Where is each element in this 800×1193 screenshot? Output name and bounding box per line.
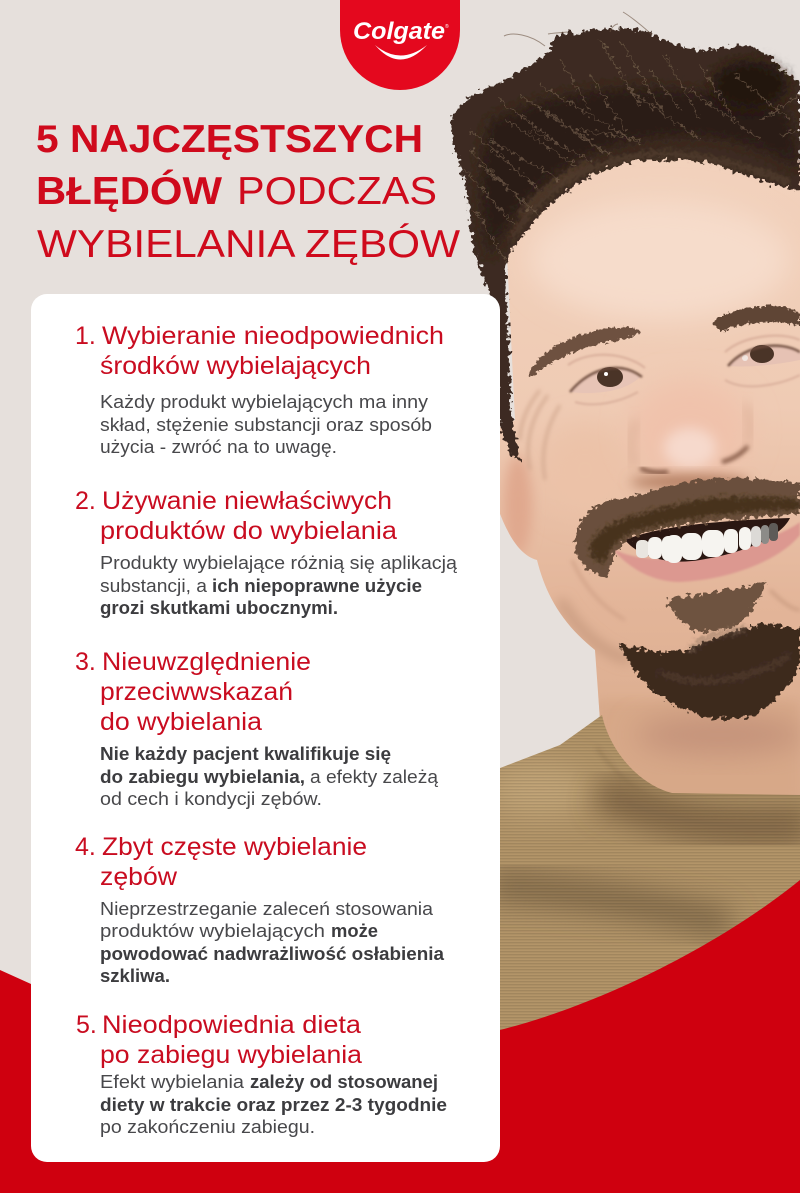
item 1: środków wybielających xyxy=(100,352,371,380)
item 2: Używanie niewłaściwych xyxy=(102,487,392,515)
neck and face skin xyxy=(495,145,800,800)
item 2: produktów do wybielania xyxy=(100,517,397,545)
soul patch xyxy=(667,582,767,632)
item 3: przeciwwskazań xyxy=(100,678,293,706)
item 3: Nieuwzględnienie xyxy=(102,648,311,676)
item 3: 3. xyxy=(75,648,96,676)
sweater xyxy=(490,715,800,1040)
item 4: szkliwa. xyxy=(100,966,170,986)
item 2: grozi skutkami ubocznymi. xyxy=(100,598,338,618)
mouth: lips and teeth xyxy=(612,518,800,582)
title: 5 NAJCZĘSTSZYCH xyxy=(36,118,423,161)
item 2 xyxy=(75,487,458,618)
item 1: skład, stężenie substancji oraz sposób xyxy=(100,415,432,435)
item 3: do zabiegu wybielania, xyxy=(100,767,305,787)
item 5: 5. xyxy=(76,1011,97,1039)
stray hairs xyxy=(504,12,652,46)
item 5: po zakończeniu zabiegu. xyxy=(100,1117,315,1137)
red wave xyxy=(0,880,800,1193)
item 4: zębów xyxy=(100,863,178,891)
item 3: do wybielania xyxy=(100,708,262,736)
mustache xyxy=(575,479,800,578)
photo: smiling man xyxy=(451,12,800,1040)
item 1: 1. xyxy=(75,322,96,350)
item 5: Nieodpowiednia dieta xyxy=(102,1011,361,1039)
item 4: Nieprzestrzeganie zaleceń stosowania xyxy=(100,899,434,919)
panel: list of mistakes xyxy=(31,294,500,1162)
item 5 xyxy=(76,1011,447,1137)
logo: Colgate badge: ® xyxy=(445,23,449,30)
item 4 xyxy=(75,833,445,986)
item 2: ich niepoprawne użycie xyxy=(212,576,422,596)
title: BŁĘDÓW xyxy=(36,169,222,213)
item 2: Produkty wybielające różnią się aplikacją xyxy=(100,553,458,573)
item 4: Zbyt częste wybielanie xyxy=(102,833,367,861)
eyes xyxy=(568,336,800,404)
eyebrows xyxy=(528,306,800,378)
title: PODCZAS xyxy=(237,170,437,213)
title xyxy=(36,118,460,266)
goatee xyxy=(620,623,800,719)
item 4: powodować nadwrażliwość osłabienia xyxy=(100,944,445,964)
item 5: Efekt wybielania xyxy=(100,1072,245,1092)
title: WYBIELANIA ZĘBÓW xyxy=(37,223,460,266)
item 1 xyxy=(75,322,444,457)
item 4: produktów wybielających xyxy=(100,921,325,941)
item 5: po zabiegu wybielania xyxy=(100,1041,362,1069)
item 2: 2. xyxy=(75,487,96,515)
item 2: substancji, a xyxy=(100,576,208,596)
item 5: zależy od stosowanej xyxy=(250,1072,438,1092)
item 1: Każdy produkt wybielających ma inny xyxy=(100,392,428,412)
item 3 xyxy=(75,648,439,809)
item 5: diety w trakcie oraz przez 2-3 tygodnie xyxy=(100,1095,447,1115)
item 4: może xyxy=(331,921,378,941)
teeth xyxy=(636,523,778,563)
item 3: od cech i kondycji zębów. xyxy=(100,789,322,809)
logo: Colgate badge xyxy=(340,0,460,90)
item 1: użycia - zwróć na to uwagę. xyxy=(100,437,337,457)
item 3: Nie każdy pacjent kwalifikuje się xyxy=(100,744,391,764)
item 4: 4. xyxy=(75,833,96,861)
hair xyxy=(451,28,800,462)
item 3: a efekty zależą xyxy=(310,767,439,787)
logo: Colgate badge: Colgate xyxy=(353,18,445,45)
item 1: Wybieranie nieodpowiednich xyxy=(102,322,444,350)
